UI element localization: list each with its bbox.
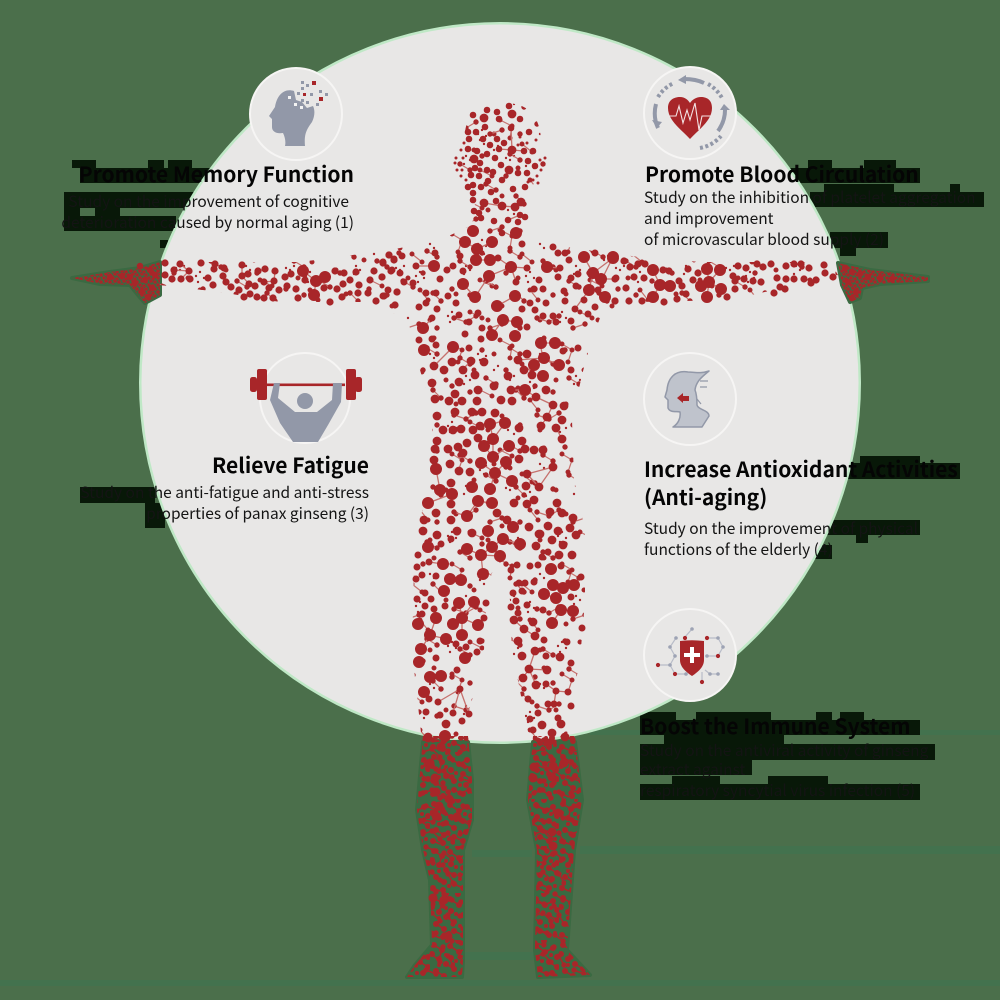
- connecting lines: [174, 128, 721, 714]
- icon: heart with arrows: [644, 67, 736, 159]
- text: memory study: deterioration caused by normal aging (1): [61, 211, 354, 233]
- panel: immune system: [640, 609, 929, 801]
- text: antioxidant study: Study on the improvement of physical: [644, 517, 918, 539]
- text: blood circulation study: of microvascular blood supply (2): [644, 228, 884, 250]
- lower leg larger dots: [428, 737, 564, 936]
- text: immune system study: respiratory syncytial virus infection (5): [640, 779, 915, 801]
- human figure of connected dots: [72, 103, 928, 977]
- background circle: [142, 24, 858, 742]
- heading: immune system: Boost the Immune System: [640, 711, 910, 741]
- small dots: [382, 244, 616, 730]
- lower leg backdrops: [72, 262, 928, 977]
- lower leg dot texture: [407, 736, 590, 977]
- hand larger dots: [110, 266, 892, 298]
- heading: antioxidant: Increase Antioxidant Activities: [644, 454, 958, 484]
- dark text blocks outside the circle: [64, 160, 984, 800]
- heading: memory: Promote Memory Function: [79, 159, 354, 189]
- ear clusters: [455, 137, 545, 183]
- heading: blood circulation: Promote Blood Circulation: [645, 159, 919, 189]
- panel: fatigue: [80, 353, 369, 524]
- panel: blood circulation: [644, 67, 976, 250]
- text: immune system study: Study on the antiviral activity of ginseng: [640, 739, 929, 761]
- text: fatigue study: properties of panax ginseng (3): [146, 502, 369, 524]
- arm dots: [165, 255, 833, 305]
- text: memory study: Study on the improvement of cognitive: [68, 190, 349, 212]
- text: antioxidant study: functions of the elderly (4): [644, 538, 833, 560]
- hand dot texture: [72, 262, 928, 303]
- circle halo: [140, 24, 860, 742]
- heading: antioxidant: (Anti-aging): [644, 482, 767, 512]
- icon: shield with molecules: [644, 609, 736, 701]
- second dot texture on upper body: [155, 103, 838, 742]
- text: immune system study: extract against: [640, 758, 746, 780]
- panel: antioxidant: [644, 353, 958, 560]
- text: blood circulation study: and improvement: [644, 207, 774, 229]
- icon: head with dissolving memory: [250, 68, 342, 160]
- text: fatigue study: Study on the anti-fatigue and anti-stress: [80, 481, 369, 503]
- head dots: [468, 106, 535, 233]
- lower leg second dot texture: [407, 736, 590, 977]
- text: blood circulation study: Study on the inhibition of platelet aggregation: [644, 186, 976, 208]
- medium dots: [423, 114, 576, 737]
- heading: fatigue: Relieve Fatigue: [212, 450, 369, 480]
- panel: memory: [61, 68, 354, 233]
- icon: weightlifter: [250, 353, 362, 443]
- icon: aging head: [644, 353, 736, 445]
- large dots: [303, 231, 721, 736]
- background bands: [0, 730, 1000, 986]
- fine dot texture on upper body: [155, 103, 838, 742]
